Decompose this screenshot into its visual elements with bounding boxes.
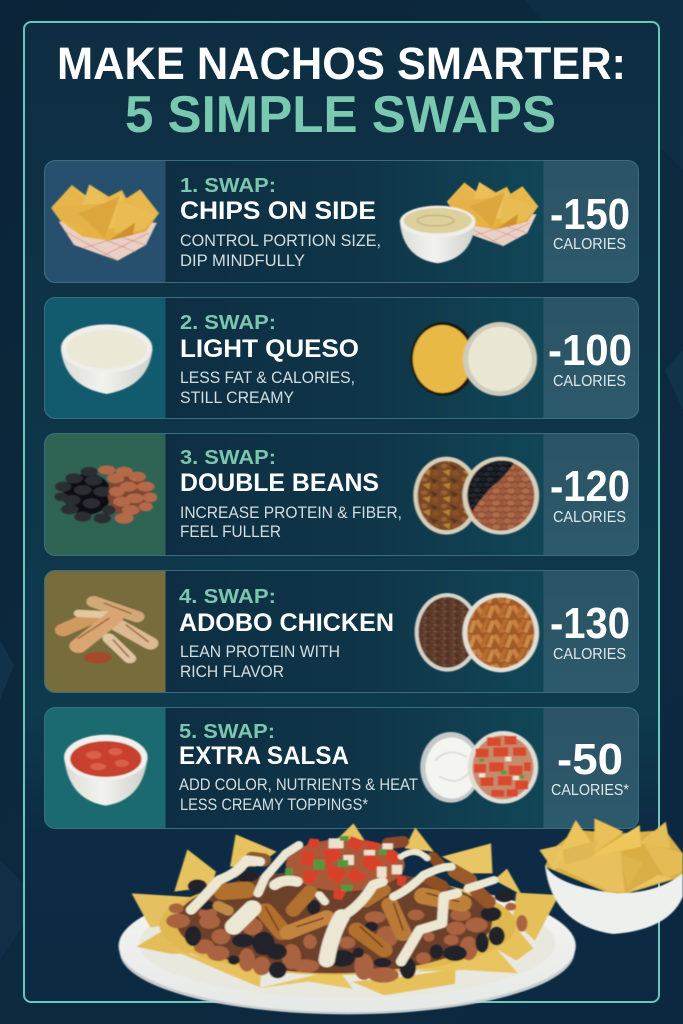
black beans xyxy=(185,870,514,979)
heading: swap 5: 5. SWAP: xyxy=(179,720,275,743)
text: swap 3 description xyxy=(180,504,402,541)
heading: swap 4: ADOBO CHICKEN xyxy=(179,609,394,637)
icon: salsa bowl xyxy=(64,735,148,806)
text: swap 3 description: FEEL FULLER xyxy=(180,523,281,541)
plate xyxy=(119,880,576,1014)
bowl xyxy=(545,865,683,934)
text: swap 5 description: ADD COLOR, NUTRIENTS & HEAT xyxy=(179,776,418,794)
heading: swap 2 xyxy=(180,311,359,363)
stat: minus 50 calories: -50 xyxy=(557,735,623,784)
icon: chips basket behind queso bowl xyxy=(447,182,538,246)
text: swap 4 description: LEAN PROTEIN WITH xyxy=(180,643,340,661)
tortilla chips xyxy=(132,823,559,995)
text: swap 4 description xyxy=(180,643,340,681)
stat: minus 150 calories: CALORIES xyxy=(553,236,626,253)
text: swap 2 description xyxy=(180,369,355,407)
panel: swap 4 adobo chicken xyxy=(44,570,640,693)
illustration: plate of loaded nachos xyxy=(119,823,576,1014)
stat: minus 130 calories: CALORIES xyxy=(553,646,626,663)
icon: grilled chicken strips xyxy=(63,602,150,663)
icon: light queso bowl xyxy=(61,324,152,394)
text: swap 2 description: LESS FAT & CALORIES, xyxy=(180,369,355,387)
stat: minus 150 calories: -150 xyxy=(550,190,630,239)
heading: swap 4: 4. SWAP: xyxy=(179,585,276,608)
panel: swap 5 extra salsa xyxy=(44,707,640,829)
stat: minus 130 calories: -130 xyxy=(550,599,630,648)
text: swap 5 description xyxy=(179,776,418,814)
text: swap 4 description: RICH FLAVOR xyxy=(180,663,284,681)
icon: ground beef vs adobo chicken bowls xyxy=(415,593,539,672)
icon: regular vs light queso dishes xyxy=(411,322,537,396)
beans base xyxy=(176,870,492,973)
illustration: white bowl of tortilla chips xyxy=(539,818,683,934)
heading: swap 2: 2. SWAP: xyxy=(180,311,276,334)
text: swap 5 description: LESS CREAMY TOPPINGS* xyxy=(180,796,369,814)
heading: swap 2: LIGHT QUESO xyxy=(180,335,359,363)
text: swap 1 description: DIP MINDFULLY xyxy=(180,252,305,270)
crema drizzle xyxy=(191,845,494,962)
chips in bowl xyxy=(539,818,683,897)
panel: swap 2 light queso xyxy=(44,297,640,419)
heading: swap 3: DOUBLE BEANS xyxy=(180,469,379,497)
title: 5 SIMPLE SWAPS xyxy=(125,86,556,144)
stat: minus 120 calories: CALORIES xyxy=(553,509,626,526)
title xyxy=(57,38,626,144)
heading: swap 1: CHIPS ON SIDE xyxy=(180,197,376,225)
icon: black and pinto beans pile xyxy=(54,465,157,524)
stat: minus 100 calories: -100 xyxy=(548,326,632,375)
panel: swap 3 double beans xyxy=(44,433,640,556)
pico de gallo xyxy=(285,836,407,900)
heading: swap 3: 3. SWAP: xyxy=(180,446,276,469)
pinto beans xyxy=(166,903,527,983)
title: MAKE NACHOS SMARTER: xyxy=(57,38,626,89)
stat: minus 120 calories: -120 xyxy=(550,462,630,511)
stat: minus 100 calories: CALORIES xyxy=(553,373,626,390)
text: swap 1 description: CONTROL PORTION SIZE, xyxy=(180,232,381,250)
icon: meat vs bean bowls xyxy=(413,457,539,535)
heading: swap 4 xyxy=(179,585,394,637)
panel: swap 1 chips on side xyxy=(44,160,640,283)
icon: queso bowl xyxy=(400,206,476,263)
stat: minus 50 calories: CALORIES* xyxy=(551,782,629,799)
heading: swap 5 xyxy=(179,720,349,770)
text: swap 2 description: STILL CREAMY xyxy=(180,389,294,407)
text: swap 3 description: INCREASE PROTEIN & FIBER, xyxy=(180,504,402,522)
heading: swap 3 xyxy=(180,446,379,497)
stat: minus 50 calories xyxy=(551,735,629,799)
heading: swap 1: 1. SWAP: xyxy=(180,174,276,197)
icon: chips in paper basket xyxy=(51,184,159,261)
adobo chicken pieces xyxy=(218,842,488,950)
text: swap 1 description xyxy=(180,232,381,270)
icon: sour cream vs pico de gallo bowls xyxy=(420,731,538,804)
heading: swap 5: EXTRA SALSA xyxy=(179,742,349,770)
heading: swap 1 xyxy=(180,174,376,225)
